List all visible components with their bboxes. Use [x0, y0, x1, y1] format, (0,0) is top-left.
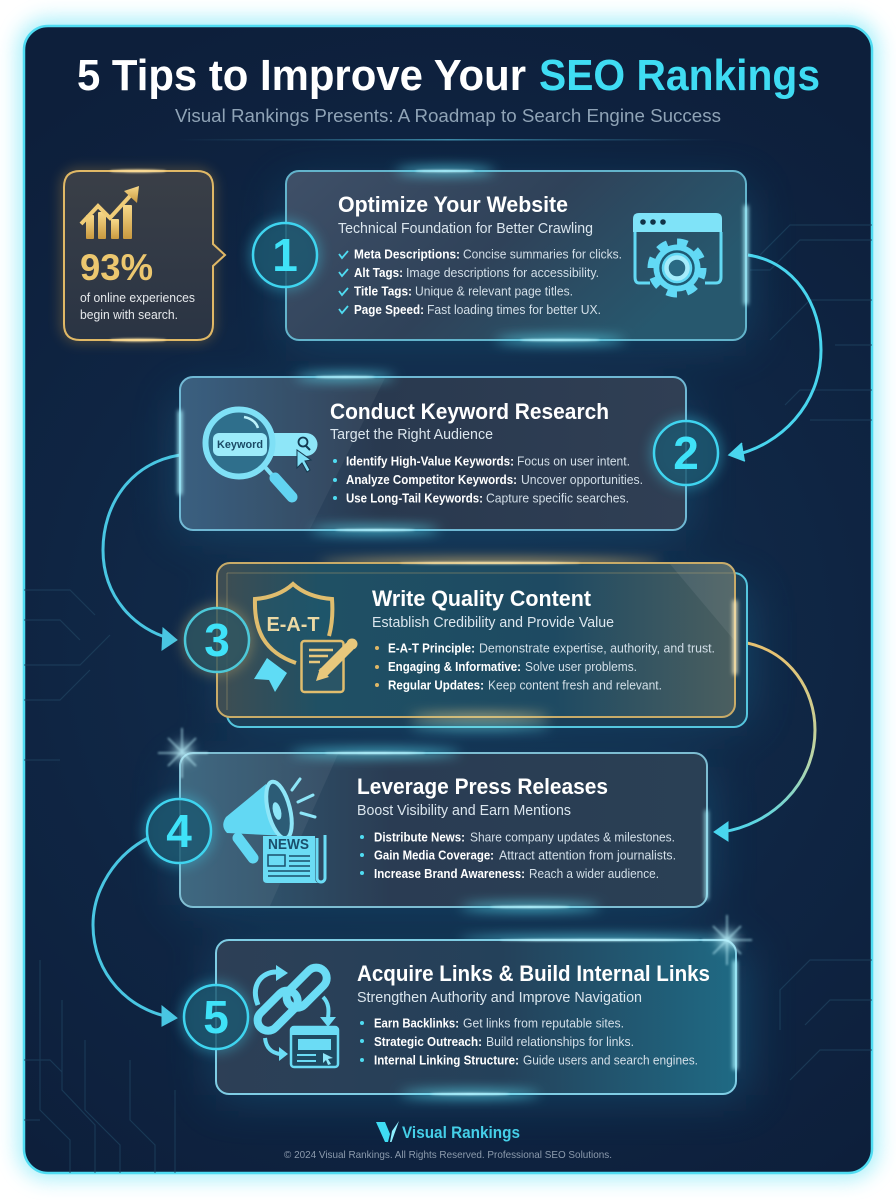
- footer logo: Visual Rankings: [402, 1124, 520, 1142]
- title: 5 Tips to Improve Your: [77, 51, 526, 100]
- icon: megaphone and newspaper: [223, 779, 325, 883]
- bullet list: Reach a wider audience.: [529, 867, 659, 881]
- card heading: Leverage Press Releases: [357, 774, 608, 799]
- icon: E-A-T shield with document and pencil: [254, 584, 358, 692]
- step badge 2: [650, 417, 722, 489]
- checklist: Alt Tags:: [354, 266, 403, 280]
- checklist: Unique & relevant page titles.: [415, 284, 573, 298]
- step badge 3: 3: [204, 614, 230, 666]
- step badge 3: [181, 604, 253, 676]
- step badge 5: 5: [203, 991, 229, 1043]
- bullet list: Internal Linking Structure:: [374, 1054, 519, 1068]
- stat description: of online experiences: [80, 290, 195, 305]
- checklist: Fast loading times for better UX.: [427, 303, 601, 317]
- bullet list: Uncover opportunities.: [521, 473, 643, 487]
- step badge 1: [249, 219, 321, 291]
- bullet list: Gain Media Coverage:: [374, 848, 494, 862]
- bullet list: Solve user problems.: [525, 660, 637, 674]
- step badge 1: 1: [272, 229, 298, 281]
- bullet list: [375, 642, 715, 692]
- title: SEO Rankings: [539, 51, 820, 100]
- bullet list: Analyze Competitor Keywords:: [346, 473, 517, 487]
- checklist: Page Speed:: [354, 303, 424, 317]
- bullet list: Increase Brand Awareness:: [374, 867, 525, 881]
- footer logo: [376, 1121, 520, 1142]
- title: [77, 51, 820, 100]
- panel: step 2 keyword research: [178, 374, 686, 533]
- card heading: Conduct Keyword Research: [330, 399, 609, 424]
- bullet list: Build relationships for links.: [486, 1035, 634, 1049]
- stat value: 93%: [80, 247, 153, 288]
- bullet list: [333, 454, 643, 506]
- bullet list: [360, 1016, 698, 1068]
- step badge 2: 2: [673, 427, 699, 479]
- bullet list: Engaging & Informative:: [388, 660, 521, 674]
- bullet list: Use Long-Tail Keywords:: [346, 492, 483, 506]
- card subheading: Strengthen Authority and Improve Navigation: [357, 989, 642, 1006]
- icon: browser window with gear: [633, 213, 722, 294]
- icon: chain links with browser window: [253, 963, 338, 1067]
- card heading: Acquire Links & Build Internal Links: [357, 961, 710, 986]
- bullet list: Get links from reputable sites.: [463, 1016, 624, 1030]
- icon: rising bar chart: [81, 186, 139, 239]
- checklist: Concise summaries for clicks.: [463, 248, 622, 262]
- step badge 4: 4: [166, 805, 192, 857]
- bullet list: Strategic Outreach:: [374, 1035, 482, 1049]
- bullet list: Keep content fresh and relevant.: [488, 678, 662, 692]
- bullet list: Regular Updates:: [388, 678, 484, 692]
- bullet list: E-A-T Principle:: [388, 642, 475, 656]
- bullet list: Earn Backlinks:: [374, 1016, 459, 1030]
- connector arrow 4 to 5: [93, 838, 177, 1026]
- icon: E-A-T shield with document and pencil: E-A-T: [266, 614, 320, 636]
- bullet list: Distribute News:: [374, 830, 465, 844]
- checklist: Image descriptions for accessibility.: [406, 266, 599, 280]
- panel: step 4 leverage press releases: [158, 728, 708, 910]
- bullet list: Share company updates & milestones.: [470, 830, 675, 844]
- connector arrow 3 to 4: [714, 643, 815, 841]
- card subheading: Technical Foundation for Better Crawling: [338, 220, 593, 237]
- step badge 5: [180, 981, 252, 1053]
- checklist: [339, 248, 622, 317]
- connector arrow 2 to 3: [103, 455, 180, 650]
- checklist: Meta Descriptions:: [354, 248, 460, 262]
- icon: megaphone and newspaper: NEWS: [268, 836, 309, 853]
- footer copyright: © 2024 Visual Rankings. All Rights Reserved. Professional SEO Solutions.: [284, 1149, 612, 1161]
- checklist: Title Tags:: [354, 284, 412, 298]
- icon: magnifier with keyword search: Keyword: [217, 439, 263, 451]
- bullet list: [360, 830, 676, 881]
- panel: 93% statistic callout: [60, 168, 225, 343]
- stat description: [80, 290, 195, 322]
- step badge 4: [143, 795, 215, 867]
- bullet list: Demonstrate expertise, authority, and trust.: [479, 642, 715, 656]
- panel: step 1 optimize your website: [286, 168, 748, 343]
- bullet list: Guide users and search engines.: [523, 1054, 698, 1068]
- icon: magnifier with keyword search: [206, 410, 318, 497]
- card subheading: Boost Visibility and Earn Mentions: [357, 802, 571, 819]
- subtitle: Visual Rankings Presents: A Roadmap to Search Engine Success: [175, 105, 721, 126]
- bullet list: Focus on user intent.: [517, 454, 630, 468]
- bullet list: Attract attention from journalists.: [499, 848, 676, 862]
- bullet list: Capture specific searches.: [486, 492, 629, 506]
- card heading: Write Quality Content: [372, 586, 592, 611]
- bullet list: Identify High-Value Keywords:: [346, 454, 514, 468]
- card subheading: Target the Right Audience: [330, 426, 493, 443]
- panel: step 5 acquire links: [216, 915, 752, 1097]
- card subheading: Establish Credibility and Provide Value: [372, 614, 614, 631]
- panel: step 3 write quality content: [217, 560, 747, 729]
- stat description: begin with search.: [80, 307, 178, 322]
- connector arrow 1 to 2: [729, 255, 821, 461]
- card heading: Optimize Your Website: [338, 192, 568, 217]
